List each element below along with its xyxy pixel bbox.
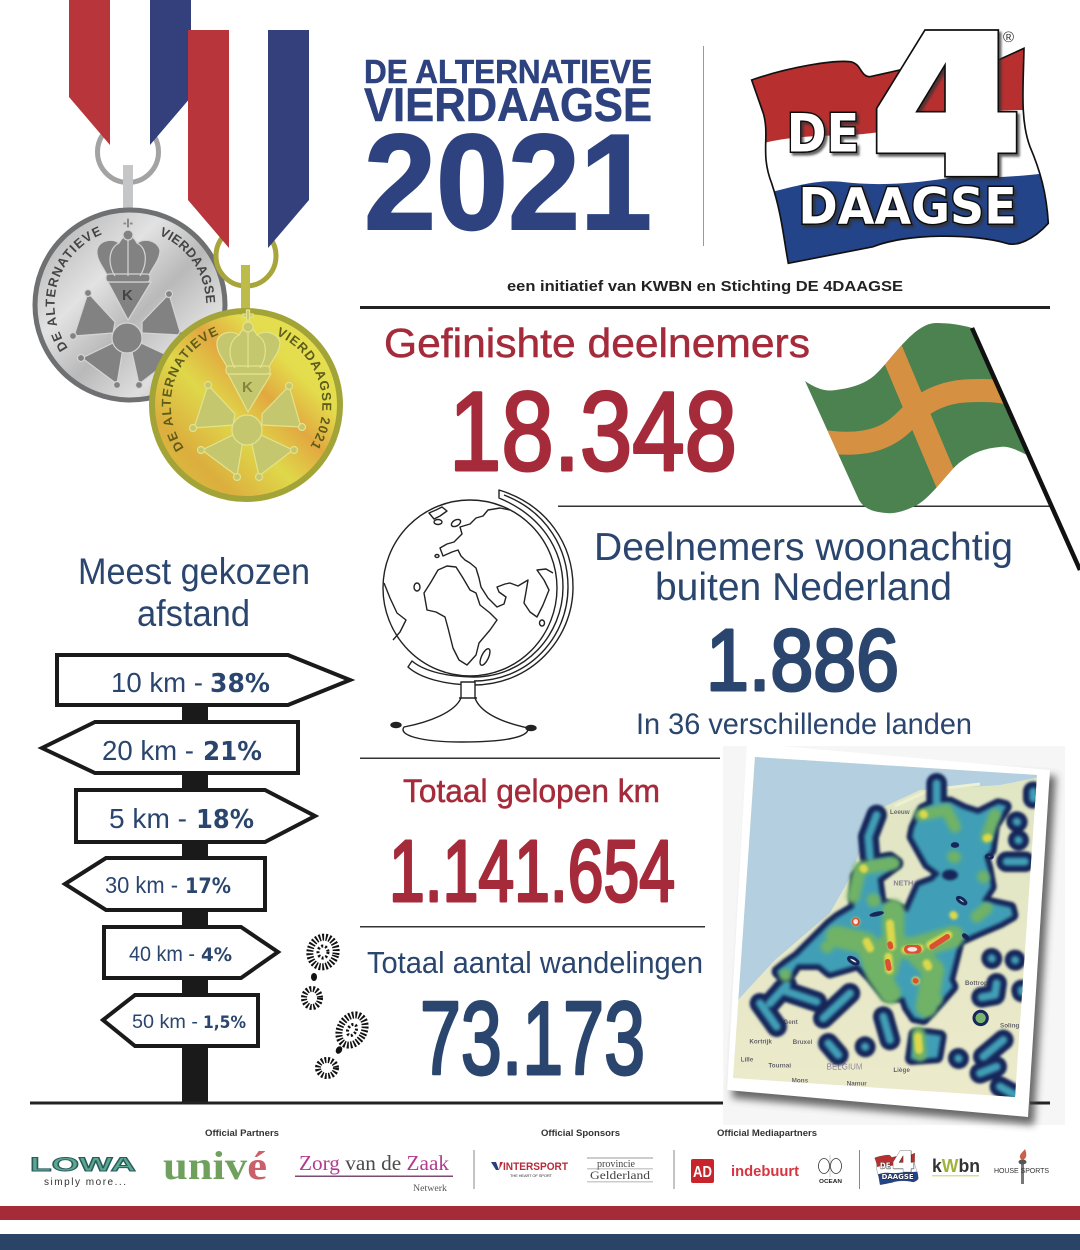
stat: total km [389, 773, 675, 920]
silver medal: K [122, 287, 133, 304]
title block [364, 53, 652, 258]
flag pole [972, 328, 1080, 570]
logo: Provincie Gelderland: Gelderland [590, 1168, 650, 1182]
sign: 20 km [42, 722, 298, 773]
heading line 1: Deelnemers woonachtig [594, 526, 1013, 569]
medals [32, 0, 343, 502]
map place names: Gent [783, 1019, 799, 1026]
initiative line: een initiatief van KWBN en Stichting DE 4DAAGSE [507, 278, 903, 295]
number: 73.173 [420, 981, 645, 1097]
map place names: Soling [1000, 1022, 1019, 1029]
number: 18.348 [449, 369, 737, 494]
logo: small De 4Daagse [873, 1149, 920, 1186]
sign: 20 km: 21% [203, 737, 262, 767]
heat map photo [723, 740, 1065, 1125]
logo: KWBN: kWbn [932, 1156, 980, 1176]
map holes [848, 844, 992, 965]
partner strip [30, 1128, 1049, 1193]
sign: 40 km [104, 927, 278, 978]
icon: footprints [304, 934, 370, 1076]
registered mark: ® [1003, 29, 1014, 46]
heat layers [760, 783, 1033, 1095]
heading: Gefinishte deelnemers [384, 320, 810, 366]
silver medal [32, 0, 228, 402]
continents [440, 508, 553, 617]
sign: 30 km: 17% [185, 874, 231, 898]
logo: indebuurt: indebuurt [731, 1163, 799, 1180]
map place names: Kortrijk [749, 1038, 772, 1045]
logo: LOWA [30, 1155, 137, 1188]
map place names: Mons [792, 1078, 809, 1085]
sign: 50 km: 50 km - [132, 1012, 198, 1033]
stat: finished participants [384, 320, 810, 494]
gold medal [149, 30, 343, 502]
sign: 40 km: 4% [201, 944, 232, 966]
logo: AD: AD [693, 1164, 712, 1181]
sign: 50 km [103, 995, 258, 1046]
logo: Provincie Gelderland: provincie [597, 1159, 636, 1170]
sign: 5 km: 5 km - [109, 803, 187, 834]
sign: 5 km: 18% [196, 805, 254, 835]
globe base [403, 682, 528, 742]
map: NETH [893, 878, 913, 887]
logo: LOWA: simply more... [44, 1177, 126, 1188]
gold ribbon [188, 30, 309, 248]
number: 1.141.654 [389, 823, 675, 920]
logo: Provincie Gelderland [587, 1157, 653, 1182]
heading: partners: Official Partners [205, 1128, 279, 1138]
map place names: Namur [847, 1080, 867, 1087]
logo: LOWA: LOWA [30, 1155, 137, 1176]
logo: Ocean [818, 1155, 842, 1185]
sign: 5 km [76, 790, 315, 842]
map place names: Leeuw [890, 809, 910, 816]
silver medal: VIERDAAGSE [162, 227, 216, 304]
heading: most chosen distance [78, 551, 310, 634]
map place names: BELGIUM [827, 1062, 863, 1071]
flag cross [827, 345, 1004, 488]
map place names [741, 809, 1019, 1087]
countries note: In 36 verschillende landen [636, 708, 972, 741]
footer band: blue [0, 1234, 1080, 1250]
outlying ring [974, 1011, 987, 1025]
globe arm [408, 490, 573, 685]
map place names: Bruxel [793, 1039, 813, 1046]
number: 1.886 [706, 612, 899, 709]
logo: Ocean: OCEAN [819, 1179, 842, 1185]
logo: Intersport: INTERSPORT [503, 1161, 568, 1173]
photo frame [727, 743, 1050, 1117]
post [182, 704, 208, 1102]
icon: globe [383, 490, 573, 742]
logo: Zorg van de Zaak: Zorg van de Zaak [299, 1151, 449, 1175]
silver medal: DE ALTERNATIEVE [46, 226, 102, 352]
logo: Intersport: THE HEART OF SPORT [510, 1173, 553, 1178]
heading: most chosen distance: afstand [137, 593, 250, 634]
sign: 50 km: 1,5% [203, 1013, 246, 1033]
logo: Zorg van de Zaak [295, 1151, 453, 1193]
logo: House of Sports: HOUSE SPORTS [994, 1168, 1049, 1175]
map place names: Liège [893, 1067, 910, 1074]
gold medal: VIERDAAGSE 2021 [279, 326, 332, 448]
heading: media partners: Official Mediapartners [717, 1128, 817, 1138]
heading line 2: buiten Nederland [655, 566, 952, 609]
logo: Intersport [491, 1161, 568, 1178]
stat: total walks [367, 945, 703, 1097]
title year: 2021 [364, 106, 652, 258]
stat: participants abroad [594, 526, 1013, 741]
map place names: Tournai [768, 1062, 791, 1069]
map [733, 757, 1037, 1097]
map place names: Lille [741, 1056, 754, 1063]
icon: green flag [805, 323, 1080, 570]
map place names: Bottrop [965, 980, 988, 987]
logo: Univé: univé [163, 1143, 267, 1188]
heading: most chosen distance: Meest gekozen [78, 551, 310, 592]
silver ribbon [69, 0, 191, 145]
logo: Zorg van de Zaak: Netwerk [413, 1183, 448, 1193]
logo: House of Sports [994, 1149, 1049, 1184]
heading: Totaal gelopen km [403, 773, 660, 809]
gold medal: DE ALTERNATIEVE [162, 326, 218, 452]
logo: AD [691, 1159, 714, 1183]
footer band: red [0, 1206, 1080, 1220]
heading: sponsors: Official Sponsors [541, 1128, 620, 1138]
title line 1: DE ALTERNATIEVE [364, 53, 652, 90]
logo: De 4Daagse [740, 20, 1060, 270]
sign: 30 km: 30 km - [105, 872, 178, 898]
gold medal: K [242, 379, 253, 396]
heading: Totaal aantal wandelingen [367, 945, 703, 980]
sign: 10 km: 10 km - [111, 667, 203, 698]
title line 2: VIERDAAGSE [364, 78, 652, 131]
sign: 10 km: 38% [210, 669, 270, 699]
sign: 20 km: 20 km - [102, 735, 194, 766]
sign: 40 km: 40 km - [129, 943, 195, 966]
sign: 10 km [57, 655, 350, 705]
signpost [42, 655, 350, 1102]
sign: 30 km [65, 858, 265, 910]
